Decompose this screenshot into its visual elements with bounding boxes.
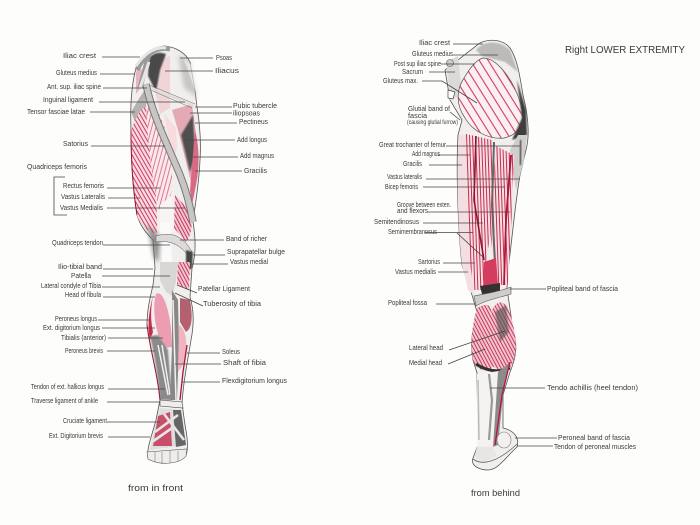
label: Lateral condyle of Tibia: Lateral condyle of Tibia: [41, 281, 101, 290]
gluteus maximus: [458, 58, 523, 138]
label: Flexdigitorium longus: Flexdigitorium longus: [222, 376, 287, 385]
label: Tibialis (anterior): [61, 333, 163, 342]
label: Patella: Patella: [71, 271, 91, 280]
label: Ext. Digitorium brevis: Ext. Digitorium brevis: [49, 431, 103, 440]
label: Satorius: Satorius: [63, 139, 88, 148]
label: Patella: [71, 271, 170, 280]
label: Gluteus medius: Gluteus medius: [56, 68, 97, 77]
lateral thigh band: [510, 135, 527, 190]
sacrum: [446, 56, 462, 100]
label: Quadriceps tendon: [52, 238, 170, 247]
label: Vastus Lateralis: Vastus Lateralis: [61, 192, 105, 201]
stippled pelvis shading: [178, 55, 198, 98]
label: Ext. Digitorium brevis: [49, 431, 150, 440]
toes: [147, 449, 187, 463]
pale thigh centre: [160, 195, 174, 232]
label: Add magnus: [193, 151, 274, 160]
medial head of gastrocnemius: [492, 302, 516, 370]
label: Peroneal band of fascia: Peroneal band of fascia: [558, 433, 630, 442]
label: Quadriceps tendon: Quadriceps tendon: [52, 238, 103, 247]
label: Vastus medial: [192, 257, 268, 266]
label: Semimembranosus: Semimembranosus: [388, 227, 437, 236]
label: Tuberosity of tibia: [175, 293, 261, 308]
label: Pubic tubercle: [195, 101, 277, 110]
label: Tensor fasciae latae: Tensor fasciae latae: [27, 107, 85, 116]
tibialis anterior: [154, 293, 172, 348]
cruciate ligament: [152, 414, 184, 442]
label: Iliacus: Iliacus: [215, 66, 239, 75]
label: Vastus medial: Vastus medial: [230, 257, 268, 266]
rear leg silhouette: [445, 40, 528, 470]
outer thigh strip: [458, 135, 474, 295]
label: Bicep femoris: Bicep femoris: [385, 182, 418, 191]
title: Right LOWER EXTREMITY: [565, 44, 685, 56]
label: Bicep femoris: [385, 182, 505, 191]
label: Band of richer: [180, 234, 268, 243]
label: Iliac crest: [63, 51, 140, 60]
label: Semimembranosus: [388, 227, 483, 257]
shading at outer knee: [146, 224, 160, 262]
label: Peroneus longus: Peroneus longus: [55, 314, 97, 323]
label: Vastus lateralis: Vastus lateralis: [387, 172, 422, 181]
vastus medialis: [174, 195, 192, 242]
label: Rectus femoris: [63, 181, 160, 190]
label: Suprapatellar bulge: [193, 247, 285, 256]
label: Gracilis (rear): [403, 159, 462, 168]
label: Shaft of fibia: Shaft of fibia: [223, 358, 266, 367]
label: Tuberosity of tibia: Tuberosity of tibia: [203, 299, 261, 308]
label: Sartorius: Sartorius: [418, 257, 440, 266]
label: Cruciate ligament: [63, 416, 160, 425]
biceps femoris: [490, 146, 514, 285]
tibia shaft: [170, 290, 179, 400]
label: Peroneal band of fascia: [515, 433, 630, 442]
label: Vastus Medialis: [60, 203, 185, 212]
label: Great trochanter of femur: Great trochanter of femur: [379, 140, 446, 149]
label: Groove between exten. and flexors: Groove between exten.: [397, 200, 451, 209]
outer thigh contour: [131, 130, 160, 400]
label: Peroneus brevis: Peroneus brevis: [65, 346, 103, 355]
lateral hip shadow: [512, 80, 527, 140]
label: Iliac crest: Iliac crest: [63, 51, 96, 60]
lateral head of gastrocnemius: [472, 305, 494, 370]
gluteus medius: [136, 68, 144, 94]
label: Gracilis: [195, 166, 267, 175]
label: Traverse ligament of ankle: [31, 396, 160, 405]
sartorius: [146, 84, 193, 222]
label: Traverse ligament of ankle: Traverse ligament of ankle: [31, 396, 98, 405]
patella and ligament: [160, 262, 178, 296]
label: Gracilis (rear): Gracilis: [403, 159, 422, 168]
iliacus and psoas: [150, 56, 170, 114]
label: Popliteal band of fascia: Popliteal band of fascia: [547, 284, 618, 293]
label: Gracilis: Gracilis: [244, 166, 267, 175]
label: Ext. digitorium longus: [43, 323, 155, 332]
label: Patellar Ligament: [177, 284, 250, 293]
label: Tensor fasciae latae: [27, 107, 135, 116]
label: Iliacus: [165, 66, 239, 75]
label: Quadriceps femoris: Quadriceps femoris: [27, 162, 87, 171]
inner knee shading: [186, 250, 193, 272]
label: Ant. sup. iliac spine: [47, 82, 147, 91]
label: Sacrum: Sacrum: [402, 67, 423, 76]
gluteus medius shading: [476, 42, 518, 72]
label: Rectus femoris: Rectus femoris: [63, 181, 104, 190]
posterior superior iliac spine: [446, 60, 454, 66]
label: Gluteus medius: [56, 68, 135, 77]
caption: from behind: from behind: [471, 488, 520, 499]
label: Ant. sup. iliac spine: Ant. sup. iliac spine: [47, 82, 101, 91]
label: Sartorius: [418, 257, 475, 266]
label: Pubic tubercle: Pubic tubercle: [233, 101, 277, 110]
quadriceps tendon: [160, 222, 172, 262]
label: Medial head: [409, 349, 485, 367]
label: Gluteus medius (rear): Gluteus medius: [412, 49, 453, 58]
transverse ligament of ankle: [160, 400, 183, 408]
label: Satorius: [63, 139, 165, 148]
label: Glutial band of fascia: Glutial band of: [408, 104, 450, 113]
popliteal fossa: [483, 258, 498, 290]
label: Semitendinosus: [374, 217, 483, 226]
label: Popliteal fossa: [388, 298, 475, 307]
heel and ankle: [474, 447, 497, 462]
peroneus: [149, 296, 153, 340]
label: Sacrum: [402, 67, 455, 76]
label: Iliac crest (rear): [419, 38, 483, 47]
label: Head of fibula: Head of fibula: [65, 290, 101, 299]
label: Gluteus max.: [383, 76, 477, 103]
label: Vastus medialis: [395, 267, 468, 276]
label: Suprapatellar bulge: Suprapatellar bulge: [227, 247, 285, 256]
label: Add longus: [185, 135, 267, 144]
label: Soleus: Soleus: [222, 347, 240, 356]
front leg silhouette: [131, 46, 200, 463]
label: Pectineus: Pectineus: [239, 117, 268, 126]
label: Lateral condyle of Tibia: [41, 281, 160, 290]
label: Shaft of fibia: [175, 358, 266, 367]
label: Peroneus brevis: [65, 346, 155, 355]
label: Post sup iliac spine: Post sup iliac spine: [394, 59, 441, 68]
adductors: [172, 104, 198, 186]
label: Cruciate ligament: Cruciate ligament: [63, 416, 107, 425]
label: Add magnus (rear): [412, 149, 470, 158]
label: Tendo achillis (heel tendon): Tendo achillis (heel tendon): [547, 383, 638, 392]
label: Pectineus: [195, 117, 268, 126]
achilles tendon: [477, 371, 499, 447]
label: Band of richer: Band of richer: [226, 234, 268, 243]
band of richer: [156, 234, 192, 258]
caption: from in front: from in front: [128, 483, 183, 494]
label: Psoas: Psoas: [216, 53, 232, 62]
bracket: quadriceps group: [54, 177, 67, 215]
label: Add longus: Add longus: [237, 135, 267, 144]
semitendinosus, semimembranosus: [466, 134, 493, 290]
label: Soleus: [187, 347, 240, 356]
label: Ilio-tibial band: Ilio-tibial band: [58, 262, 102, 271]
label: iliopsoas: iliopsoas: [233, 108, 260, 118]
label: Vastus Medialis: Vastus Medialis: [60, 203, 103, 212]
label: Vastus lateralis: [387, 172, 520, 181]
label: Patellar Ligament: Patellar Ligament: [198, 284, 250, 293]
label: Gluteus medius (rear): [412, 49, 498, 58]
popliteal band of fascia: [474, 287, 511, 306]
label: Psoas: [180, 53, 232, 62]
iliac crest: [137, 48, 170, 88]
label: Ilio-tibial band: [58, 262, 153, 271]
label: Flexdigitorium longus: [182, 376, 287, 385]
label: Iliac crest (rear): Iliac crest: [419, 38, 450, 47]
label: iliopsoas: [190, 108, 260, 118]
gastrocnemius and soleus: [180, 298, 192, 332]
lower vastus medialis: [177, 262, 190, 290]
label: Glutial band of fascia: fascia: [408, 111, 427, 120]
label: Lateral head: [409, 331, 505, 352]
label: Semitendinosus: Semitendinosus: [374, 217, 419, 226]
inguinal ligament: [147, 86, 194, 106]
label: Gluteus max.: Gluteus max.: [383, 76, 418, 85]
label: Popliteal fossa: Popliteal fossa: [388, 298, 427, 307]
label: Peroneus longus: [55, 314, 150, 323]
peroneal tendons and shin shading: [150, 335, 172, 400]
rectus femoris: [146, 104, 172, 224]
figure: leg from in front: [131, 46, 205, 464]
vastus lateralis: [132, 108, 157, 234]
label: Popliteal band of fascia: [510, 284, 618, 293]
label: Tendon of peroneal muscles: Tendon of peroneal muscles: [554, 442, 636, 451]
label: Vastus medialis: Vastus medialis: [395, 267, 436, 276]
label: Medial head: Medial head: [409, 358, 442, 367]
figure: leg from behind: [445, 40, 528, 470]
tensor fasciae latae: [131, 90, 147, 122]
label: Head of fibula: [65, 290, 155, 299]
label: Glutial band of fascia: (causing glutial furrow): [407, 119, 458, 126]
label: Add magnus (rear): Add magnus: [412, 149, 440, 158]
label: Groove between exten. and flexors: and flexors: [397, 206, 428, 215]
label: Tibialis (anterior): Tibialis (anterior): [61, 333, 106, 342]
label: Tendon of peroneal muscles: [517, 442, 636, 451]
dorsum of foot: [150, 408, 186, 450]
label: Ext. digitorium longus: Ext. digitorium longus: [43, 323, 100, 332]
label: Vastus Lateralis: [61, 192, 140, 201]
label: Inguinal ligament: Inguinal ligament: [43, 95, 93, 104]
peroneal muscles: [493, 362, 510, 447]
label: Glutial band of fascia: [407, 104, 460, 126]
label: Lateral head: Lateral head: [409, 343, 443, 352]
label: Groove between exten. and flexors: [397, 200, 510, 215]
label: Tendon of ext. hallicus longus: Tendon of ext. hallicus longus: [31, 382, 104, 391]
label: Add magnus: Add magnus: [240, 151, 274, 160]
